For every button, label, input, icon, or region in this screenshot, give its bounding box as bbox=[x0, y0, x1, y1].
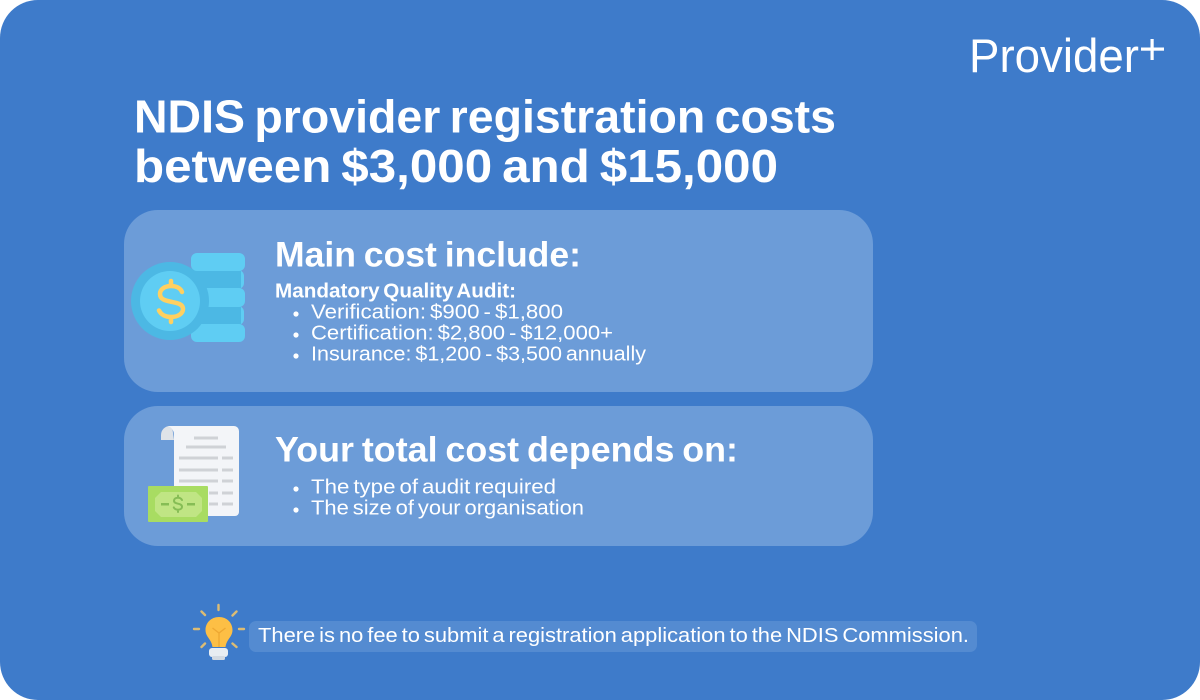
logo: Provider+: Provider bbox=[969, 29, 1139, 82]
panel: total cost bbox=[124, 406, 873, 546]
title bbox=[134, 90, 836, 192]
list: factors: The type of audit required bbox=[311, 476, 556, 498]
icon: invoice and banknote bbox=[148, 426, 239, 522]
heading: main cost: Main cost include: bbox=[275, 236, 581, 274]
title: NDIS provider registration costs bbox=[134, 90, 836, 142]
text: audit label: Mandatory Quality Audit: bbox=[275, 280, 516, 302]
heading: total cost: Your total cost depends on: bbox=[275, 430, 738, 470]
callout: no application fee bbox=[249, 621, 977, 652]
list: costs: Verification: $900 - $1,800 bbox=[311, 300, 563, 324]
list: factors bbox=[293, 476, 584, 520]
icon: coins bbox=[131, 253, 245, 342]
title: between $3,000 and $15,000 bbox=[134, 140, 778, 192]
list: factors: The size of your organisation bbox=[311, 496, 584, 520]
list: costs: Insurance: $1,200 - $3,500 annually bbox=[311, 342, 647, 366]
list: costs: Certification: $2,800 - $12,000+ bbox=[311, 322, 613, 344]
callout: no application fee: There is no fee to submit a registration application to the NDIS Commission. bbox=[258, 624, 969, 647]
list: costs bbox=[293, 300, 647, 366]
panel: main cost bbox=[124, 210, 873, 392]
icon: light bulb bbox=[194, 605, 244, 660]
